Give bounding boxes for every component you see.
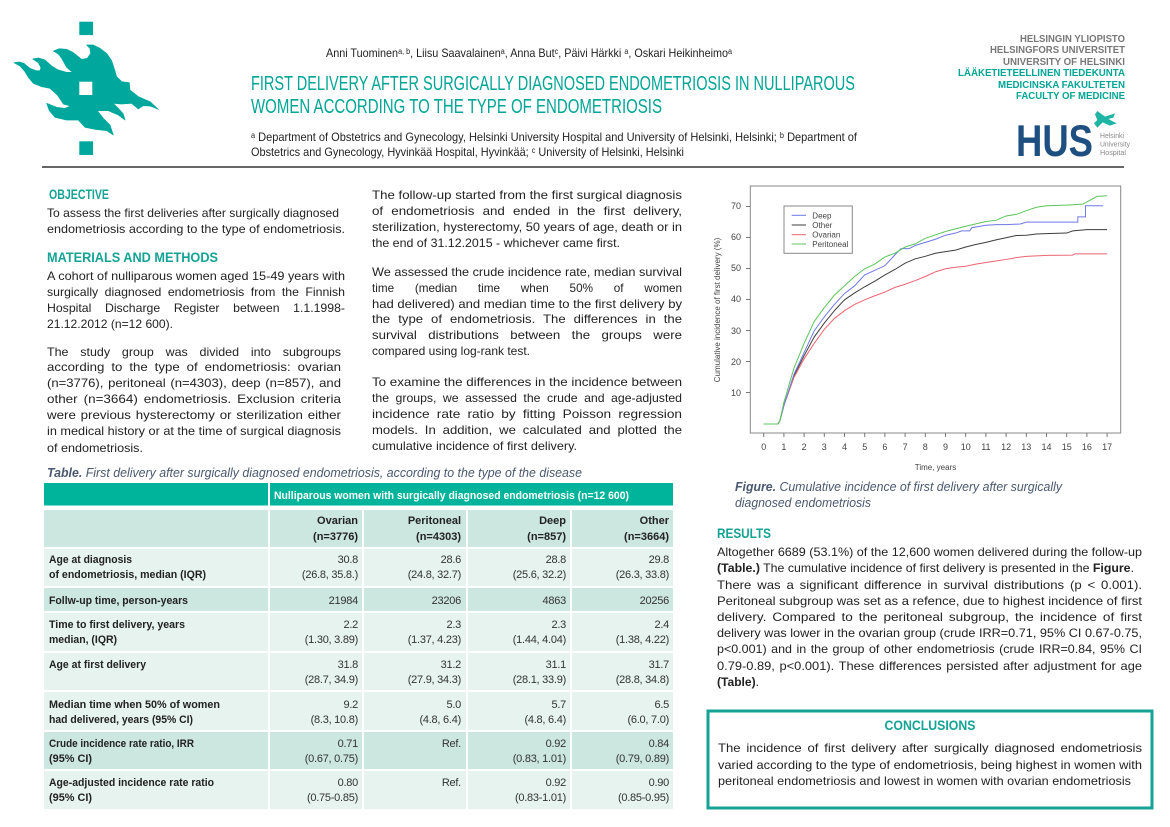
- column: other: 29.8: [649, 554, 669, 566]
- line chart: cumulative incidence of first delivery: [713, 186, 1121, 472]
- panel: materials and methods, middle column: of endometriosis and ended in the first delivery,: [372, 204, 682, 218]
- panel: results: delivery. Compared to the peritoneal subgroup, the incidence of first: [717, 610, 1143, 624]
- figure caption: [735, 479, 1063, 510]
- authors: , Anna But: [505, 46, 555, 60]
- x axis labels: 7: [903, 442, 908, 452]
- authors: a: [624, 47, 629, 56]
- panel: materials and methods, left column: of endometriosis.: [47, 441, 143, 455]
- affiliations: b: [780, 131, 785, 140]
- panel: materials and methods, middle column: sterilization, hysterectomy, 50 years of age, death or in: [372, 220, 682, 234]
- panel: materials and methods, left column: other (n=3664) endometriosis. Exclusion criteria: [47, 392, 341, 406]
- x axis labels: 14: [1041, 442, 1052, 452]
- panel: materials and methods, middle column: The follow-up started from the first surgical diagnosis: [372, 188, 682, 202]
- panel: materials and methods, left column: 21.12.2012 (n=12 600).: [47, 317, 173, 331]
- panel: materials and methods, left column: MATERIALS AND METHODS: [47, 249, 218, 265]
- column: other: 0.84: [649, 738, 669, 750]
- column: ovarian: 9.2: [343, 699, 358, 711]
- panel: materials and methods, middle column: survival distributions between the groups were: [372, 328, 682, 342]
- panel: materials and methods, middle column: cumulative incidence of first delivery.: [372, 439, 577, 453]
- x axis labels: 4: [842, 442, 847, 452]
- panel: materials and methods, left column: The study group was divided into subgroups: [47, 345, 341, 359]
- x axis labels: 11: [981, 442, 991, 452]
- university and faculty names: HELSINGFORS UNIVERSITET: [990, 45, 1125, 56]
- column: ovarian: 21984: [329, 595, 358, 607]
- panel: materials and methods, middle column: [372, 188, 682, 453]
- panel: materials and methods, left column: (n=3776), peritoneal (n=4303), deep (n=857), and: [47, 376, 341, 390]
- university and faculty names: HELSINGIN YLIOPISTO: [1020, 34, 1125, 45]
- panel: materials and methods, middle column: had delivered) and median time to the first delivery by: [372, 297, 682, 311]
- table header band: [44, 483, 673, 506]
- column: peritoneal: 28.6: [441, 554, 461, 566]
- column: deep: (4.8, 6.4): [524, 714, 566, 726]
- panel: materials and methods, left column: according to the type of endometriosis: ovarian: [47, 360, 341, 374]
- column: deep: 0.92: [546, 777, 566, 789]
- affiliations: c: [532, 146, 535, 155]
- column: deep: Deep: [539, 515, 566, 527]
- column: other: Other: [640, 515, 670, 527]
- affiliations: Department of: [784, 130, 858, 144]
- column: deep: (25.6, 32.2): [513, 569, 566, 581]
- column: ovarian: (1.30, 3.89): [305, 634, 358, 646]
- row labels: Age-adjusted incidence rate ratio: [49, 777, 214, 789]
- x axis labels: 15: [1062, 442, 1072, 452]
- curves: [764, 196, 1107, 424]
- authors: a: [501, 47, 505, 56]
- column: ovarian: 0.80: [338, 777, 358, 789]
- column: deep: 5.7: [551, 699, 566, 711]
- column: ovarian: (26.8, 35.8.): [302, 569, 358, 581]
- panel: results: [717, 525, 1143, 689]
- panel: materials and methods, middle column: compared using log-rank test.: [372, 344, 530, 358]
- x axis labels: 17: [1102, 442, 1112, 452]
- y axis title: Cumulative incidence of first delivery (%): [713, 237, 722, 382]
- panel: materials and methods, middle column: To examine the differences in the incidence between: [372, 375, 682, 389]
- column: other: (0.85-0.95): [618, 792, 669, 804]
- panel: materials and methods, left column: were previous hysterectomy or sterilization either: [46, 408, 341, 422]
- column: other: [616, 515, 670, 804]
- affiliations: Obstetrics and Gynecology, Hyvinkää Hospital, Hyvinkää;: [251, 145, 556, 159]
- column: deep: (28.1, 33.9): [513, 674, 566, 686]
- row labels: [49, 554, 220, 804]
- column: deep: 31.1: [546, 659, 566, 671]
- x axis labels: 3: [822, 442, 827, 452]
- panel: results: p<0.001) and in the group of other endometriosis (crude IRR=0.84, 95% CI: [717, 642, 1142, 656]
- column: peritoneal: (4.8, 6.4): [419, 714, 461, 726]
- row labels: of endometriosis, median (IQR): [49, 569, 206, 581]
- panel: results: There was a significant difference in survival distributions (p < 0.001).: [717, 578, 1142, 592]
- column: other: 2.4: [654, 619, 669, 631]
- column: ovarian: 30.8: [338, 554, 358, 566]
- column: deep: 2.3: [551, 619, 566, 631]
- authors: , Oskari Heikinheimo: [628, 46, 728, 60]
- university and faculty names: LÄÄKETIETEELLINEN TIEDEKUNTA: [958, 66, 1125, 79]
- panel: conclusions: [708, 711, 1152, 808]
- y axis labels: 30: [731, 326, 741, 336]
- icon: HUS logo: Helsinki: [1100, 131, 1124, 140]
- row labels: median, (IQR): [49, 634, 117, 646]
- x axis labels: [761, 442, 1112, 472]
- panel: materials and methods, middle column: We assessed the crude incidence rate, median survival: [372, 265, 682, 279]
- panel: objective: [47, 186, 345, 236]
- chart legend: [784, 206, 852, 253]
- panel: conclusions: varied according to the type of endometriosis, being highest in women with: [718, 758, 1142, 772]
- column: other: (6.0, 7.0): [627, 714, 669, 726]
- panel: materials and methods, left column: surgically diagnosed endometriosis from the Finnish: [47, 285, 345, 299]
- column: ovarian: 31.8: [338, 659, 358, 671]
- column: other: 0.90: [649, 777, 669, 789]
- chart legend: Ovarian: [812, 231, 840, 240]
- panel: results: (Table.) The cumulative incidence of first delivery is presented in the Figure.: [717, 561, 1134, 575]
- panel: materials and methods, middle column: the groups, we assessed the crude and age-adjusted: [372, 391, 682, 405]
- column: ovarian: (28.7, 34.9): [305, 674, 358, 686]
- panel: materials and methods, middle column: incidence rate ratio by fitting Poisson regression: [372, 407, 682, 421]
- column: peritoneal: Ref.: [442, 738, 461, 750]
- column: other: (26.3, 33.8): [616, 569, 669, 581]
- column: deep: (0.83-1.01): [515, 792, 566, 804]
- panel: objective: endometriosis according to the type of endometriosis.: [47, 222, 345, 236]
- column: ovarian: 0.71: [338, 738, 358, 750]
- row labels: Follw-up time, person-years: [49, 595, 188, 607]
- authors: , Päivi Härkki: [558, 46, 624, 60]
- panel: materials and methods, middle column: time (median time when 50% of women: [372, 281, 682, 295]
- row labels: Time to first delivery, years: [49, 619, 185, 631]
- x axis labels: 9: [943, 442, 948, 452]
- column: deep: (1.44, 4.04): [513, 634, 566, 646]
- title: FIRST DELIVERY AFTER SURGICALLY DIAGNOSED ENDOMETRIOSIS IN NULLIPAROUS: [251, 73, 855, 95]
- x axis labels: 16: [1082, 442, 1092, 452]
- x axis labels: 6: [882, 442, 887, 452]
- column: deep: 4863: [543, 595, 566, 607]
- university and faculty names: UNIVERSITY OF HELSINKI: [1003, 57, 1125, 68]
- authors: a: [728, 47, 732, 56]
- column: peritoneal: 23206: [432, 595, 461, 607]
- table: first delivery by endometriosis type: [44, 483, 673, 809]
- x axis labels: 8: [923, 442, 928, 452]
- column: other: (n=3664): [624, 531, 669, 543]
- column: deep: 28.8: [546, 554, 566, 566]
- x axis labels: 13: [1021, 442, 1031, 452]
- icon: HUS logo: University: [1100, 140, 1130, 149]
- row labels: (95% CI): [49, 753, 92, 765]
- chart legend: Deep: [812, 212, 832, 220]
- column: other: 6.5: [654, 699, 669, 711]
- row labels: Median time when 50% of women: [49, 699, 220, 711]
- x axis labels: 0: [761, 442, 766, 452]
- panel: conclusions: CONCLUSIONS: [884, 717, 976, 733]
- column: peritoneal: (27.9, 34.3): [408, 674, 461, 686]
- column: other: (1.38, 4.22): [616, 634, 669, 646]
- y axis labels: 50: [731, 263, 741, 273]
- panel: materials and methods, left column: Hospital Discharge Register between 1.1.1998-: [47, 301, 345, 315]
- column: deep: [513, 515, 566, 804]
- column: other: 31.7: [649, 659, 669, 671]
- panel: results: Altogether 6689 (53.1%) of the 12,600 women delivered during the follow-up: [717, 545, 1142, 559]
- column: peritoneal: 31.2: [441, 659, 461, 671]
- panel: conclusions: The incidence of first delivery after surgically diagnosed endometriosis: [718, 741, 1142, 755]
- panel: materials and methods, middle column: the type of endometriosis. The differences in the: [372, 312, 682, 326]
- column: other: (0.79, 0.89): [616, 753, 669, 765]
- authors: c: [555, 47, 558, 56]
- column: ovarian: 2.2: [343, 619, 358, 631]
- y axis labels: 60: [731, 232, 741, 242]
- panel: results: delivery was lower in the ovarian group (crude IRR=0.71, 95% CI 0.67-0.75,: [717, 626, 1142, 640]
- panel: materials and methods, left column: [46, 249, 345, 455]
- column: peritoneal: Ref.: [442, 777, 461, 789]
- y axis labels: 70: [731, 201, 741, 211]
- y axis labels: 40: [731, 294, 741, 304]
- column: peritoneal: (24.8, 32.7): [408, 569, 461, 581]
- affiliations: Department of Obstetrics and Gynecology, Helsinki University Hospital and University of Helsinki, Helsinki;: [255, 130, 780, 144]
- icon: University of Helsinki flame logo: [14, 22, 158, 155]
- panel: results: 0.79-0.89, p<0.001). These differences persisted after adjustment for age: [717, 659, 1142, 673]
- chart legend: Peritoneal: [812, 240, 849, 249]
- y axis labels: [731, 201, 741, 398]
- column: deep: 0.92: [546, 738, 566, 750]
- icon: HUS logo: Hospital: [1100, 148, 1126, 157]
- y axis labels: 10: [731, 388, 741, 398]
- affiliations: [251, 130, 858, 159]
- table header band: Nulliparous women with surgically diagnosed endometriosis (n=12 600): [274, 490, 629, 502]
- x axis labels: 12: [1001, 442, 1011, 452]
- row labels: (95% CI): [49, 792, 92, 804]
- authors: , Liisu Saavalainen: [410, 46, 501, 60]
- university and faculty names: MEDICINSKA FAKULTETEN: [998, 80, 1125, 91]
- column: ovarian: (0.75-0.85): [307, 792, 358, 804]
- column: ovarian: (n=3776): [313, 531, 358, 543]
- authors: a, b: [398, 47, 411, 56]
- affiliations: University of Helsinki, Helsinki: [535, 145, 684, 159]
- panel: results: (Table).: [717, 675, 759, 689]
- panel: objective: To assess the first deliveries after surgically diagnosed: [47, 206, 339, 220]
- panel: materials and methods, middle column: models. In addition, we calculated and plotted the: [372, 423, 682, 437]
- title: WOMEN ACCORDING TO THE TYPE OF ENDOMETRIOSIS: [251, 96, 662, 118]
- panel: materials and methods, middle column: the end of 31.12.2015 - whichever came first.: [372, 236, 620, 250]
- column: ovarian: Ovarian: [317, 515, 358, 527]
- column: deep: (0.83, 1.01): [513, 753, 566, 765]
- panel: materials and methods, left column: A cohort of nulliparous women aged 15-49 years with: [47, 269, 345, 283]
- column: peritoneal: Peritoneal: [408, 515, 461, 527]
- affiliations: a: [251, 131, 256, 140]
- column: ovarian: [302, 515, 358, 804]
- x axis labels: 5: [862, 442, 867, 452]
- column: peritoneal: [408, 515, 461, 789]
- panel: objective: OBJECTIVE: [49, 186, 109, 202]
- panel: conclusions: peritoneal endometriosis and lowest in women with ovarian endometriosis: [718, 774, 1131, 788]
- icon: HUS logo: HUS: [1016, 117, 1093, 166]
- column: ovarian: (8.3, 10.8): [311, 714, 358, 726]
- university and faculty names: FACULTY OF MEDICINE: [1016, 91, 1125, 102]
- column: other: (28.8, 34.8): [616, 674, 669, 686]
- column: peritoneal: (n=4303): [416, 531, 461, 543]
- column: peritoneal: 5.0: [446, 699, 461, 711]
- x axis labels: 2: [802, 442, 807, 452]
- table caption: Table. First delivery after surgically diagnosed endometriosis, according to the type of the disease: [47, 465, 582, 480]
- figure caption: Figure. Cumulative incidence of first delivery after surgically: [735, 479, 1063, 494]
- authors: Anni Tuominen: [326, 46, 406, 60]
- x axis labels: Time, years: [915, 463, 956, 472]
- title: [251, 73, 855, 118]
- column: ovarian: (0.67, 0.75): [305, 753, 358, 765]
- panel: results: Peritoneal subgroup was set as a refence, due to highest incidence of first: [717, 594, 1143, 608]
- panel: materials and methods, left column: in medical history or at the time of surgical diagnosis: [47, 424, 341, 438]
- x axis labels: 10: [961, 442, 971, 452]
- row labels: Crude incidence rate ratio, IRR: [49, 738, 194, 750]
- column: other: 20256: [640, 595, 669, 607]
- figure caption: diagnosed endometriosis: [735, 495, 871, 510]
- university and faculty names: [958, 34, 1125, 102]
- column: peritoneal: (1.37, 4.23): [408, 634, 461, 646]
- column: peritoneal: 2.3: [446, 619, 461, 631]
- row labels: Age at first delivery: [49, 659, 147, 671]
- column: deep: (n=857): [527, 531, 566, 543]
- chart legend: Other: [812, 221, 833, 230]
- y axis labels: 20: [731, 357, 741, 367]
- row labels: Age at diagnosis: [49, 554, 132, 566]
- panel: results: RESULTS: [717, 525, 771, 541]
- x axis labels: 1: [781, 442, 786, 452]
- row labels: had delivered, years (95% CI): [49, 714, 193, 726]
